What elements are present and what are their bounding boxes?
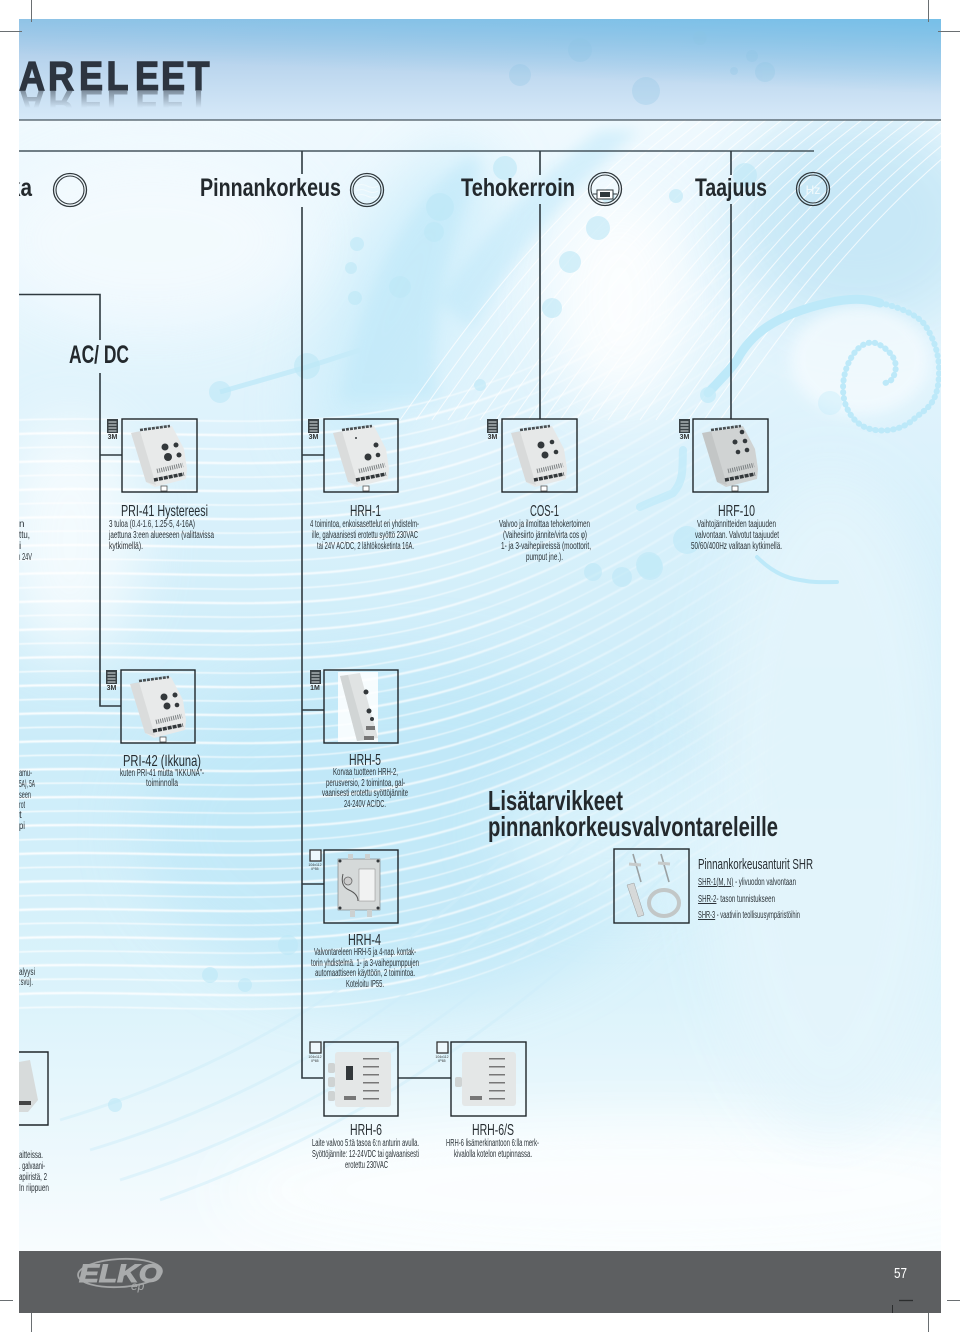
heading: Pinnankorkeus: Pinnankorkeus bbox=[200, 174, 341, 202]
cut-off text: upper bbox=[19, 522, 32, 560]
icon: enclosure: IP65 bbox=[438, 1059, 446, 1063]
title reflection: ARELEET bbox=[19, 80, 210, 126]
heading: accessories bbox=[488, 785, 778, 842]
description bbox=[691, 519, 782, 552]
connector lines bbox=[19, 151, 731, 1078]
description: torin yhdistelmä. 1- ja 3-vaihepumppujen bbox=[311, 958, 419, 969]
product image bbox=[324, 850, 398, 923]
description: 4 toimintoa, enkoisasettelut eri yhdistelm- bbox=[310, 519, 419, 530]
icon: 3M: 3M bbox=[488, 434, 498, 441]
description: perusversio, 2 toimintoa, gal- bbox=[326, 778, 405, 789]
panel: HRH-1 bbox=[308, 419, 419, 552]
name: COS-1 bbox=[530, 503, 559, 520]
logo: ELKO ep: ELKO bbox=[79, 1260, 163, 1288]
icon: 3M: 3M bbox=[108, 434, 118, 441]
icon: enclosure: IP65 bbox=[311, 1059, 319, 1063]
cut-off text: lower: In riippuen bbox=[19, 1183, 49, 1194]
description: vaanisesti erotettu syöttöjännite bbox=[322, 788, 408, 799]
product image bbox=[121, 670, 195, 743]
cut-off left page content: 5A), 5A bbox=[19, 779, 35, 790]
page number: 57 bbox=[894, 1265, 907, 1282]
icon: enclosure: 104x112 bbox=[435, 1055, 449, 1059]
panel: HRH-5 bbox=[310, 670, 408, 810]
description: Valvontareleen HRH-5 ja 4-nap. kontak- bbox=[314, 947, 416, 958]
heading: Taajuus: Taajuus bbox=[695, 174, 767, 202]
name: HRH-6 bbox=[350, 1122, 382, 1139]
product image bbox=[122, 419, 197, 492]
icon: ampere circle bbox=[54, 174, 86, 206]
description: automaattiseen käyttöön, 2 toimintoa. bbox=[315, 968, 415, 979]
heading: accessories: pinnankorkeusvalvontareleille bbox=[488, 811, 778, 842]
name: HRH-5 bbox=[349, 752, 381, 769]
description: Vaihtojännitteiden taajuuden bbox=[697, 519, 776, 530]
streaks lower left bbox=[60, 800, 680, 1200]
description bbox=[322, 767, 408, 810]
heading: accessories: Lisätarvikkeet bbox=[488, 785, 623, 816]
description bbox=[310, 519, 419, 552]
cut-off text: lower: aitteissa. bbox=[19, 1150, 43, 1161]
cut-off text: lower bbox=[19, 1150, 49, 1194]
sensors list: SHR-2- tason tunnistukseen bbox=[698, 894, 775, 905]
cut-off product box bbox=[19, 1052, 48, 1125]
description: Koteloitu IP55. bbox=[346, 979, 384, 990]
category headings bbox=[9, 174, 767, 369]
cut-off text: upper: ttu, bbox=[19, 530, 30, 541]
name: HRH-4 bbox=[348, 932, 381, 949]
product image bbox=[502, 419, 577, 492]
description: Syöttöjännite: 12-24VDC tai galvaanisesti bbox=[312, 1149, 419, 1160]
description: tai 24V AC/DC, 2 lähtökosketinta 16A. bbox=[317, 541, 414, 552]
footer bar bbox=[19, 1251, 941, 1313]
streaks left bbox=[19, 364, 694, 1010]
description bbox=[120, 768, 204, 789]
cut-off text: analysis bbox=[19, 967, 35, 988]
description: 24-240V AC/DC. bbox=[344, 799, 386, 810]
description: 3 tuloa (0.4-1.6, 1.25-5, 4-16A) bbox=[109, 519, 195, 530]
cut-off text: analysis: :svu). bbox=[19, 977, 33, 988]
icon: ampere circle: A bbox=[65, 183, 75, 200]
heading: Tehokerroin: Tehokerroin bbox=[461, 174, 575, 202]
panel: accessories bbox=[488, 785, 813, 923]
title: ARELEET bbox=[19, 54, 210, 100]
streaks upper right bbox=[400, 120, 960, 420]
name: HRH-6/S bbox=[472, 1122, 514, 1139]
product image bbox=[451, 1042, 526, 1116]
description: jaettuna 3:een alueeseen (valittavissa bbox=[108, 530, 214, 541]
bubbles bbox=[108, 156, 757, 1112]
panel: HRF-10 bbox=[679, 419, 782, 552]
panel: PRI-41 bbox=[107, 419, 214, 552]
description: kuten PRI-41 mutta "IKKUNA"- bbox=[120, 768, 204, 779]
panel: HRH-6 bbox=[308, 1042, 419, 1171]
icon: enclosure bbox=[435, 1042, 449, 1063]
description: valvontaan. Valvotut taajuudet bbox=[695, 530, 779, 541]
heading: AC/DC: AC/ DC bbox=[69, 341, 129, 369]
description: toiminnolla bbox=[146, 778, 178, 789]
cut-off text: middle bbox=[19, 768, 35, 832]
cut-off text: middle: amu- bbox=[19, 768, 32, 779]
description bbox=[108, 519, 214, 552]
description bbox=[312, 1138, 419, 1171]
cut-off text: middle: rot bbox=[19, 800, 25, 811]
description: HRH-6 lisämerkinantoon 6:lla merk- bbox=[446, 1138, 539, 1149]
logo: ELKO ep bbox=[77, 1257, 163, 1293]
icon: power factor circle bbox=[588, 172, 622, 206]
icon: enclosure: 104x112 bbox=[308, 863, 322, 867]
description: ille, galvaanisesti erotettu syöttö 230VAC bbox=[312, 530, 418, 541]
sensors list: SHR-3 - vaativiin teollisuusympäristöihin bbox=[698, 910, 800, 921]
product image bbox=[693, 419, 768, 492]
description: Valvoo ja ilmoittaa tehokertoimen bbox=[499, 519, 590, 530]
product image bbox=[324, 419, 398, 492]
cut-off text: middle: pi bbox=[19, 821, 25, 832]
icon: enclosure bbox=[308, 850, 322, 871]
icon: 3M: 3M bbox=[107, 685, 117, 692]
icon: 3M bbox=[487, 419, 498, 441]
cut-off text: upper: n bbox=[19, 519, 24, 530]
icon: 3M: 3M bbox=[309, 434, 319, 441]
description bbox=[446, 1138, 539, 1160]
product image bbox=[324, 670, 398, 743]
cut-off text: analysis: alyysi bbox=[19, 967, 35, 978]
panel: HRH-6/S bbox=[435, 1042, 539, 1160]
product image: sensors bbox=[614, 849, 689, 923]
product image bbox=[324, 1042, 398, 1116]
name: HRF-10 bbox=[718, 503, 755, 520]
icon: enclosure: IP55 bbox=[311, 867, 319, 871]
icon: enclosure bbox=[308, 1042, 322, 1063]
heading: ka: ka bbox=[9, 174, 33, 202]
header band bbox=[19, 19, 941, 120]
swooshes bbox=[340, 130, 640, 400]
cut-off text: lower: apiiristä, 2 bbox=[19, 1172, 47, 1183]
description: 1- ja 3-vaihepiireissä (moottorit, bbox=[501, 541, 591, 552]
sensors list: SHR-1(M, N) - ylivuodon valvontaan bbox=[698, 877, 796, 888]
description: pumput jne.). bbox=[526, 552, 563, 563]
header rules bbox=[19, 120, 941, 151]
name: HRH-1 bbox=[350, 503, 381, 520]
cut-off text: upper: ı 24V bbox=[19, 552, 32, 563]
icon: enclosure: 104x112 bbox=[308, 1055, 322, 1059]
panel: COS-1 bbox=[487, 419, 591, 563]
description: erotettu 230VAC bbox=[345, 1160, 388, 1171]
panel: HRH-4 bbox=[308, 850, 419, 990]
cut-off text: middle: t bbox=[19, 810, 22, 821]
description: kytkimellä). bbox=[109, 541, 143, 552]
description: 50/60/400Hz valitaan kytkimellä. bbox=[691, 541, 782, 552]
swirl bbox=[790, 305, 930, 415]
cut-off text: upper: i bbox=[19, 541, 21, 552]
icon: 3M: 3M bbox=[680, 434, 690, 441]
description: kivalolla kotelon etupinnassa. bbox=[454, 1149, 532, 1160]
name: PRI-42 (Ikkuna) bbox=[123, 753, 201, 770]
description: Laite valvoo 5:tä tasoa 6:n anturin avulla. bbox=[312, 1138, 419, 1149]
sensors heading: Pinnankorkeusanturit SHR bbox=[698, 856, 813, 873]
cut-off left page content bbox=[19, 519, 49, 1194]
cut-off text: middle: seen bbox=[19, 790, 31, 801]
icon: frequency circle bbox=[796, 172, 830, 206]
description: (Vaihesiirto jännite/virta cos φ) bbox=[503, 530, 587, 541]
sensors list bbox=[698, 877, 800, 921]
description bbox=[311, 947, 419, 990]
name: PRI-41 Hystereesi bbox=[121, 503, 208, 520]
icon: level circle bbox=[350, 174, 384, 206]
icon: 1M: 1M bbox=[310, 685, 320, 692]
logo: ELKO ep: ep bbox=[131, 1279, 145, 1293]
cut-off text: lower: . galvaani- bbox=[19, 1161, 45, 1172]
icon: frequency circle: Hz bbox=[806, 183, 820, 197]
description: Korvaa tuotteen HRH-2, bbox=[333, 767, 398, 778]
panel: PRI-42 bbox=[106, 670, 204, 789]
description bbox=[499, 519, 591, 563]
